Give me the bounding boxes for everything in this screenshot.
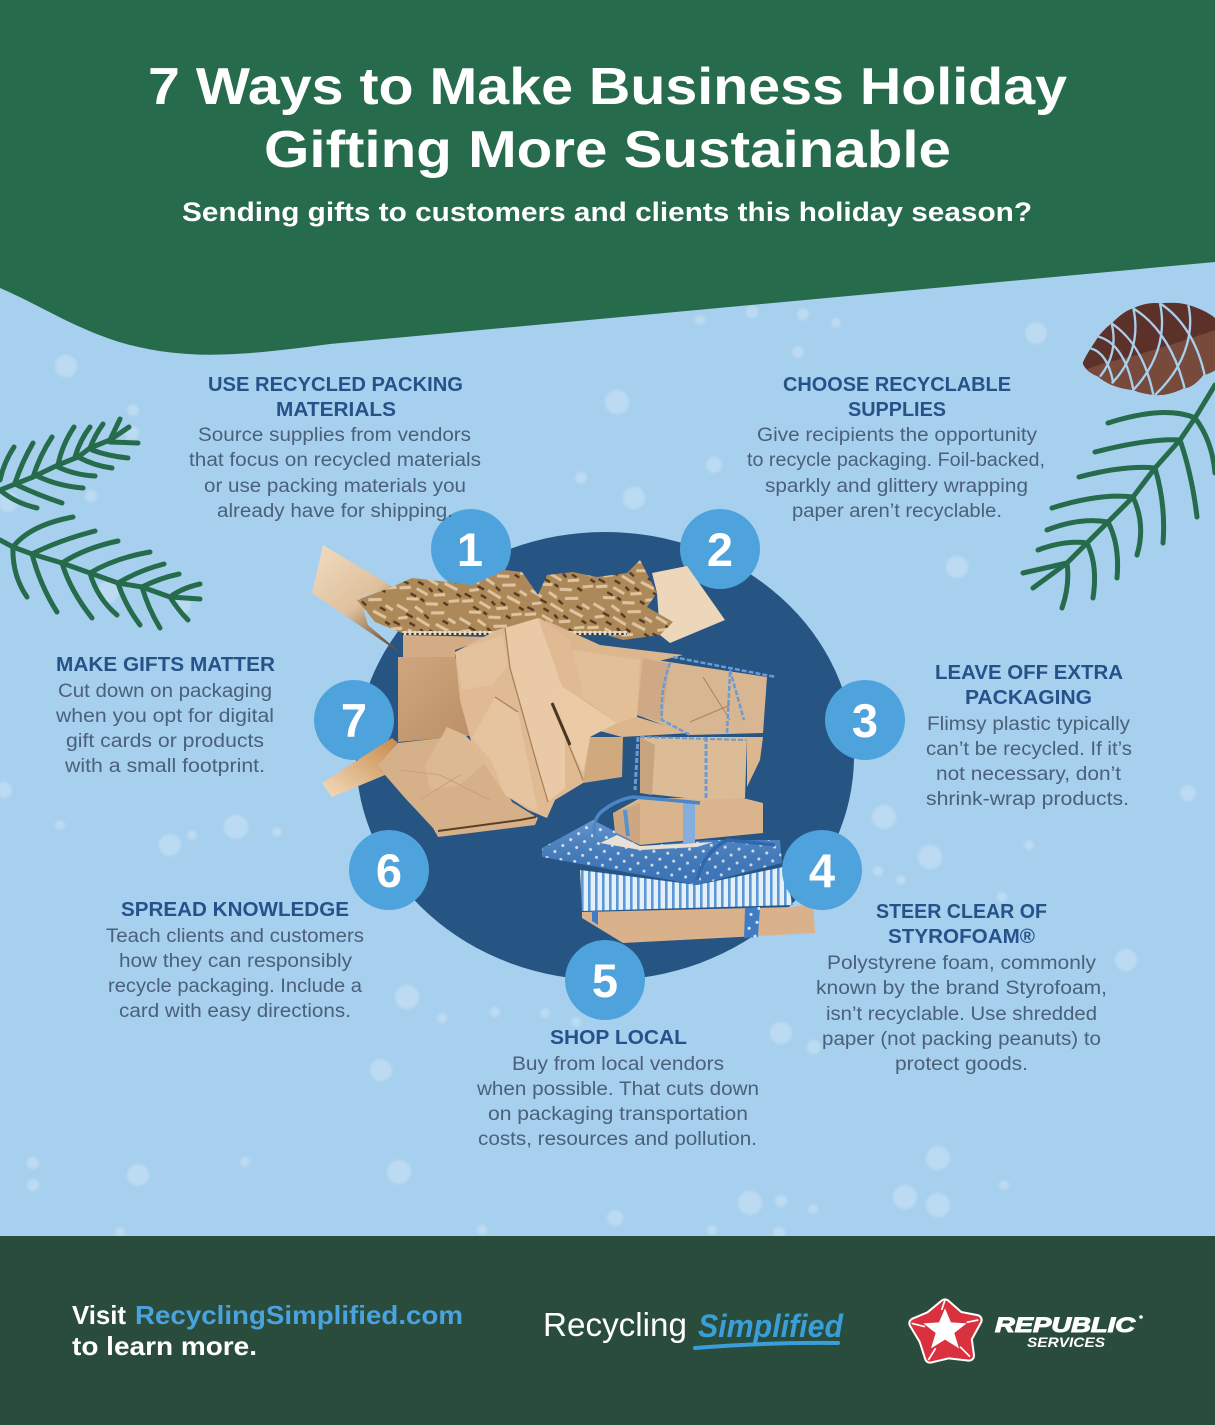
gift: third parcel [594,797,763,845]
text block 7: make gifts matter: MAKE GIFTS MATTER [56,654,276,676]
text block 4: steer clear of styrofoam: known by the brand Styrofoam, [816,978,1107,999]
crumpled paper centre [455,618,590,818]
header band [0,0,1215,355]
paper sweep behind gifts [545,620,690,737]
text block 4: steer clear of styrofoam: STEER CLEAR OF [876,901,1047,923]
text block 1: use recycled packing materials: or use packing materials you [204,476,466,497]
gift: top parcel [637,657,776,735]
badge 3: 3 [852,694,878,747]
crumpled paper tail [322,738,398,797]
footer call to action: RecyclingSimplified.com [135,1300,463,1330]
badge 2: 2 [707,523,733,576]
text block 3: leave off extra packaging: shrink-wrap products. [926,789,1129,810]
text block 6: spread knowledge: Teach clients and customers [106,926,364,947]
subtitle: Sending gifts to customers and clients this holiday season? [182,197,1032,227]
logo: Recycling Simplified: Simplified [698,1308,844,1344]
footer call to action: Visit [72,1300,126,1330]
text block 7: make gifts matter: Cut down on packaging [58,681,272,702]
wordmark: REPUBLIC [995,1314,1136,1337]
badge 4 [782,830,862,910]
text block 6: spread knowledge: how they can responsibly [119,951,353,972]
icon: upper left pine branch [0,419,138,508]
logo: Republic Services: SERVICES [1027,1334,1106,1350]
text block 2: choose recyclable supplies [747,374,1045,522]
box base right [583,737,623,783]
text block 5: shop local: on packaging transportation [488,1104,748,1125]
badge 1 [431,509,511,589]
text block 2: choose recyclable supplies: to recycle packaging. Foil-backed, [747,450,1045,471]
text block 1: use recycled packing materials: that focus on recycled materials [189,450,481,471]
text block 4: steer clear of styrofoam: protect goods. [895,1054,1028,1075]
snow dots [0,306,1196,1239]
text block 7: make gifts matter: gift cards or products [66,731,264,752]
text block 6: spread knowledge: recycle packaging. Include a [108,976,362,997]
central dark blue circle [356,532,854,980]
text block 5: shop local: when possible. That cuts down [476,1079,759,1100]
title: 7 Ways to Make Business Holiday [148,58,1067,116]
badge 4: 4 [809,844,835,897]
gift: bottom parcel [582,903,815,943]
badge 7 [314,680,394,760]
footer call to action: to learn more. [72,1331,257,1361]
text block 2: choose recyclable supplies: CHOOSE RECYCLABLE [783,374,1011,396]
text block 7: make gifts matter: with a small footprint. [64,756,265,777]
text block 4: steer clear of styrofoam [816,901,1107,1075]
shredded paper [357,560,673,640]
right flap [652,566,725,643]
text block 4: steer clear of styrofoam: Polystyrene foam, commonly [827,953,1097,974]
text block 5: shop local: SHOP LOCAL [550,1027,687,1049]
corrugated rim [402,631,627,635]
badge 2 [680,509,760,589]
badge 5: 5 [592,954,618,1007]
footer band [0,1236,1215,1425]
text block 3: leave off extra packaging: PACKAGING [965,687,1092,709]
text block 6: spread knowledge [106,899,364,1022]
text block 3: leave off extra packaging: Flimsy plastic typically [927,714,1131,735]
text block 2: choose recyclable supplies: Give recipients the opportunity [757,425,1038,446]
icon: pine cone [1082,302,1215,396]
star emblem [912,1300,978,1360]
text block 5: shop local: Buy from local vendors [512,1054,724,1075]
title: Gifting More Sustainable [264,121,951,179]
logo: Recycling Simplified [543,1306,844,1348]
text block 2: choose recyclable supplies: sparkly and glittery wrapping [765,476,1028,497]
text block 1: use recycled packing materials: USE RECYCLED PACKING [208,374,463,396]
text block 1: use recycled packing materials: MATERIALS [276,399,396,421]
photo: cardboard box, paper and gifts [312,545,815,943]
crumpled paper lower left [377,727,538,837]
text block 3: leave off extra packaging: can’t be recycled. If it’s [926,739,1132,760]
text block 1: use recycled packing materials: Source supplies from vendors [198,425,471,446]
title [148,58,1067,179]
logo: Recycling Simplified: Recycling [543,1306,687,1343]
text block 5: shop local [476,1027,759,1150]
badge 6 [349,830,429,910]
text block 4: steer clear of styrofoam: paper (not packing peanuts) to [822,1029,1101,1050]
badge 7: 7 [341,694,367,747]
gift: second parcel [635,737,763,800]
box inner and body [403,635,492,657]
icon: right pine branch [1023,385,1215,608]
text block 6: spread knowledge: SPREAD KNOWLEDGE [121,899,349,921]
text block 3: leave off extra packaging: not necessary, don’t [936,764,1122,785]
badge 6: 6 [376,844,402,897]
text block 1: use recycled packing materials: already have for shipping. [217,501,453,522]
text block 5: shop local: costs, resources and pollution. [478,1129,757,1150]
envelope card [600,835,713,850]
text block 2: choose recyclable supplies: paper aren’t recyclable. [792,501,1002,522]
gift: polka dot box [542,820,782,885]
icon: lower left pine branch [0,517,200,628]
badge 3 [825,680,905,760]
gift: striped box [580,867,793,911]
text block 7: make gifts matter [55,654,276,777]
text block 7: make gifts matter: when you opt for digital [55,706,274,727]
text block 6: spread knowledge: card with easy directions. [119,1001,351,1022]
text block 3: leave off extra packaging [926,662,1132,810]
logo: Republic Services [912,1300,1143,1360]
footer call to action [72,1300,463,1361]
left flap [312,545,403,655]
text block 4: steer clear of styrofoam: isn’t recyclable. Use shredded [826,1004,1097,1025]
text block 4: steer clear of styrofoam: STYROFOAM® [888,926,1035,948]
text block 3: leave off extra packaging: LEAVE OFF EXTRA [935,662,1123,684]
badge 5 [565,940,645,1020]
badge 1: 1 [457,523,483,576]
text block 2: choose recyclable supplies: SUPPLIES [848,399,946,421]
text block 1: use recycled packing materials [189,374,481,522]
